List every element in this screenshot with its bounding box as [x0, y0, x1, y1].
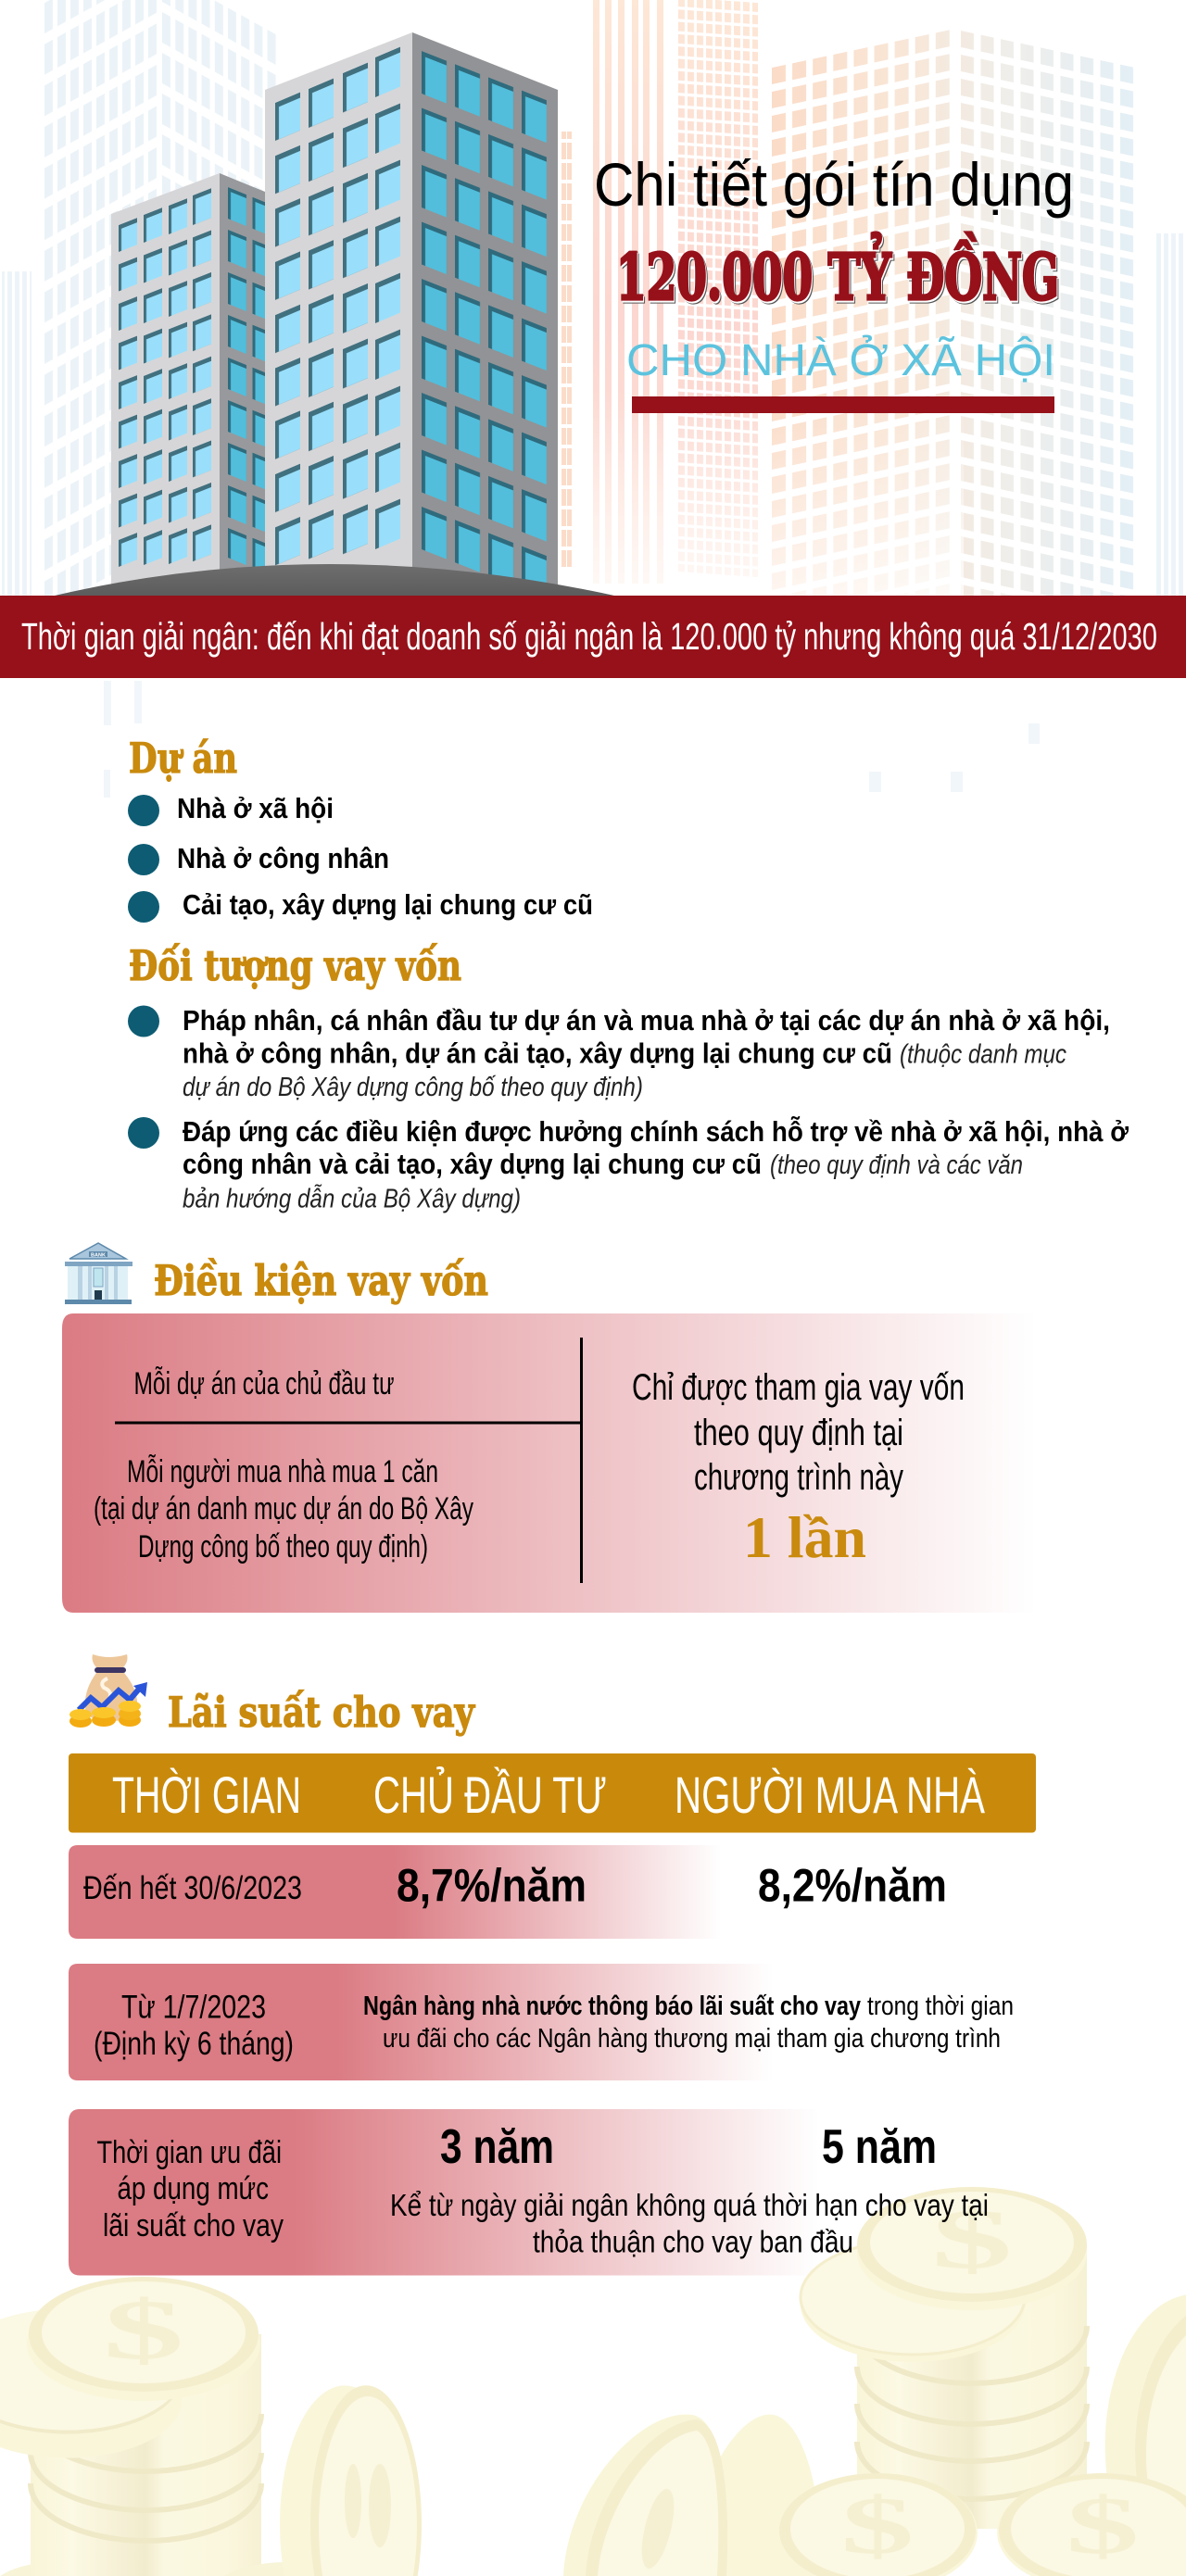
coin stack left: $ [103, 2283, 184, 2377]
flat coin bottom right: $ [1066, 2481, 1140, 2570]
title line 1: Chi tiết gói tín dụng [594, 150, 1074, 219]
ground dome [55, 564, 614, 596]
row 3: preferential period [96, 2120, 989, 2258]
row 1: until 30/6/2023: 8,7%/năm [397, 1860, 587, 1912]
coin stack right [801, 2187, 1087, 2529]
flat coin bottom centre: $ [840, 2481, 915, 2570]
background: city skyline [2, 0, 1186, 611]
row 3: preferential period: lãi suất cho vay [103, 2208, 284, 2243]
table header: NGƯỜI MUA NHÀ [675, 1766, 985, 1824]
illustration: office towers [55, 32, 614, 612]
row 2: from 1/7/2023: Từ 1/7/2023 [121, 1990, 266, 2025]
table header: CHỦ ĐẦU TƯ [373, 1766, 607, 1824]
condition: per project: Mỗi dự án của chủ đầu tư [133, 1366, 395, 1401]
row 3: preferential period: 3 năm [440, 2120, 554, 2174]
row 3: preferential period: thỏa thuận cho vay ban đầu [533, 2225, 853, 2258]
heading: loan conditions: Điều kiện vay vốn [154, 1256, 488, 1305]
condition: per buyer: Dựng công bố theo quy định) [138, 1529, 428, 1564]
condition: per buyer: (tại dự án danh mục dự án do Bộ Xây [94, 1491, 473, 1527]
condition result: 1 lần [743, 1504, 866, 1570]
row 1: until 30/6/2023: 8,2%/năm [758, 1860, 947, 1912]
table header: THỜI GIAN [112, 1766, 301, 1824]
tilted coins middle [563, 2415, 823, 2576]
section: borrowers [128, 941, 1129, 1213]
icon: bank: BANK [91, 1252, 106, 1258]
divider lines [115, 1338, 583, 1583]
tilted coin left [280, 2385, 422, 2576]
condition result: theo quy định tại [694, 1413, 903, 1453]
borrower item 1: nhà ở công nhân, dự án cải tạo, xây dựng lại chung cư cũ [183, 1037, 892, 1069]
condition result: chương trình này [694, 1457, 903, 1498]
flat coin bottom centre [777, 2473, 978, 2576]
row 2: from 1/7/2023: trong thời gian [867, 1992, 1014, 2021]
condition: per buyer: Mỗi người mua nhà mua 1 căn [127, 1454, 438, 1489]
heading: borrowers: Đối tượng vay vốn [129, 941, 461, 990]
row backgrounds [69, 1845, 834, 2275]
bullet item 1 [128, 792, 334, 826]
borrower item 2: (theo quy định và các văn [770, 1150, 1023, 1180]
heading: interest rate: Lãi suất cho vay [168, 1688, 476, 1737]
table header [69, 1753, 1036, 1832]
orange striped building [561, 0, 764, 596]
pale blue building [37, 0, 283, 611]
coin stack right: $ [931, 2193, 1013, 2286]
bullet item 3: Cải tạo, xây dựng lại chung cư cũ [183, 888, 593, 921]
condition: per buyer [94, 1454, 473, 1564]
row 1: until 30/6/2023: Đến hết 30/6/2023 [83, 1870, 302, 1906]
row 2: from 1/7/2023: ưu đãi cho các Ngân hàng thương mại tham gia chương trình [383, 2024, 1001, 2054]
far-edge buildings [2, 233, 1186, 596]
icon: bank [65, 1243, 132, 1304]
borrower item 2 [128, 1115, 1129, 1213]
pale orange to blue building [772, 30, 1133, 596]
bullet item 1: Nhà ở xã hội [177, 792, 334, 824]
tall tower [265, 32, 558, 612]
row 2: from 1/7/2023: Ngân hàng nhà nước thông báo lãi suất cho vay [363, 1992, 861, 2021]
row 2: from 1/7/2023 [94, 1990, 1014, 2062]
borrower item 1: Pháp nhân, cá nhân đầu tư dự án và mua nhà ở tại các dự án nhà ở xã hội, [183, 1004, 1110, 1037]
heading: projects: Dự án [129, 734, 237, 783]
icon: money bag with rising arrow [69, 1654, 147, 1728]
borrower item 2: công nhân và cải tạo, xây dựng lại chung cư cũ [183, 1148, 762, 1180]
borrower item 1 [128, 1004, 1110, 1102]
small tower [111, 173, 271, 597]
title [594, 150, 1074, 413]
row 3: preferential period: Thời gian ưu đãi [96, 2135, 282, 2170]
section: projects [128, 734, 593, 923]
row 3: preferential period: 5 năm [822, 2120, 937, 2174]
tilted coin right edge [1105, 2295, 1186, 2576]
borrower item 1: (thuộc danh mục [900, 1039, 1066, 1069]
panel: loan conditions [62, 1313, 1036, 1613]
row 2: from 1/7/2023: (Định kỳ 6 tháng) [94, 2026, 294, 2062]
flat coin bottom right [997, 2473, 1186, 2576]
bullet item 2: Nhà ở công nhân [177, 842, 389, 874]
condition result [632, 1367, 965, 1570]
coin stack left [0, 2277, 350, 2576]
title line 3: CHO NHÀ Ở XÃ HỘI [626, 334, 1055, 385]
row 3: preferential period: Kể từ ngày giải ngân không quá thời hạn cho vay tại [390, 2188, 989, 2222]
row 1: until 30/6/2023 [83, 1860, 947, 1912]
borrower item 2: bản hướng dẫn của Bộ Xây dựng) [183, 1184, 521, 1213]
condition result: Chỉ được tham gia vay vốn [632, 1367, 965, 1408]
borrower item 1: dự án do Bộ Xây dựng công bố theo quy định) [183, 1073, 643, 1102]
title underline bar [632, 396, 1054, 413]
row 3: preferential period: áp dụng mức [117, 2171, 269, 2206]
banner: disbursement period [0, 596, 1186, 678]
decorative coins [0, 2187, 1186, 2576]
